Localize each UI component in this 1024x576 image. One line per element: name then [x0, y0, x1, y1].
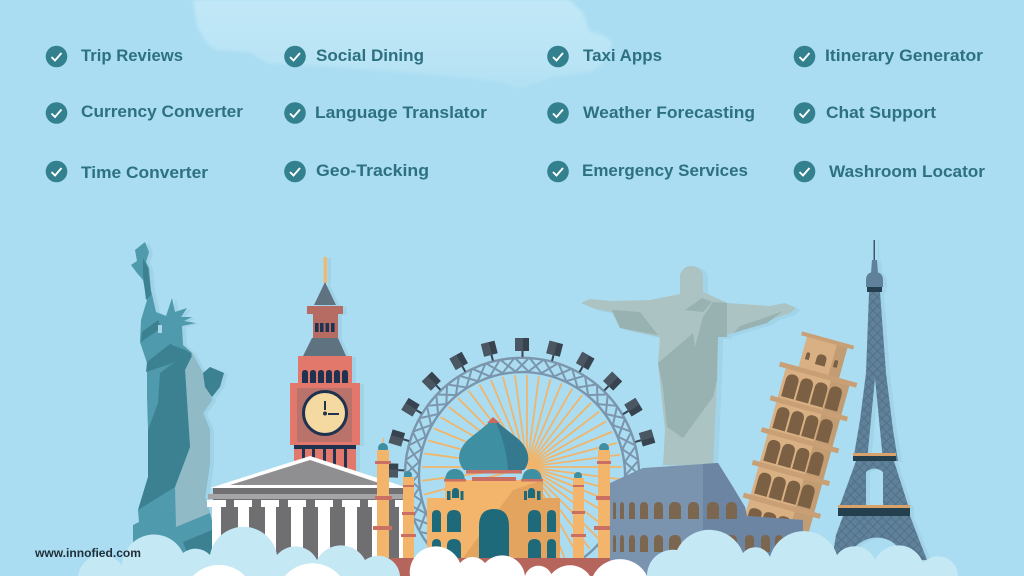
icon: check Trip Reviews [46, 46, 67, 67]
label: Chat Support: Chat Support [826, 103, 936, 122]
icon: check Currency Converter [46, 102, 67, 124]
icon: check Itinerary Generator [794, 46, 815, 67]
taj doors and windows [479, 509, 509, 558]
minaret inner left [401, 471, 416, 558]
label: Taxi Apps: Taxi Apps [583, 46, 662, 65]
icon: check Chat Support [794, 102, 815, 124]
website url: www.innofied.com [34, 548, 141, 560]
label: Washroom Locator: Washroom Locator [829, 162, 985, 181]
label: Language Translator: Language Translator [315, 103, 487, 122]
London Eye ferris wheel [385, 338, 655, 570]
label: Geo-Tracking: Geo-Tracking [316, 161, 429, 180]
feature checklist [46, 46, 985, 182]
icon: check Washroom Locator [794, 161, 815, 182]
icon: check Geo-Tracking [284, 161, 306, 182]
main dome [459, 417, 528, 470]
clock face [304, 392, 346, 434]
minaret outer right [594, 443, 613, 558]
neoclassical building [207, 456, 413, 568]
bottom pale clouds [78, 527, 958, 576]
Leaning Tower of Pisa [737, 328, 867, 538]
Statue of Liberty [131, 242, 224, 560]
Eiffel Tower [832, 240, 927, 560]
label: Currency Converter: Currency Converter [81, 102, 243, 121]
minaret outer left [373, 438, 392, 558]
icon: check Social Dining [284, 46, 306, 67]
icon: check Emergency Services [547, 161, 569, 182]
icon: check Time Converter [46, 161, 67, 182]
wheel capsules [385, 338, 655, 478]
label: Time Converter: Time Converter [81, 163, 208, 182]
top cloud [193, 0, 612, 88]
label: Weather Forecasting: Weather Forecasting [583, 103, 755, 122]
icon: check Language Translator [284, 102, 306, 124]
wheel spokes [422, 375, 622, 558]
label: Social Dining: Social Dining [316, 46, 424, 65]
label: Emergency Services: Emergency Services [582, 161, 748, 180]
icon: check Weather Forecasting [547, 102, 569, 124]
Taj Mahal [373, 417, 613, 576]
bottom white clouds [193, 546, 647, 576]
Big Ben clock tower [290, 257, 360, 472]
wheel rim [405, 358, 639, 570]
minaret inner right [571, 472, 586, 558]
label: Trip Reviews: Trip Reviews [81, 46, 183, 65]
icon: check Taxi Apps [547, 46, 569, 67]
Christ the Redeemer [581, 266, 796, 465]
label: Itinerary Generator: Itinerary Generator [825, 46, 983, 65]
Colosseum [610, 463, 803, 576]
